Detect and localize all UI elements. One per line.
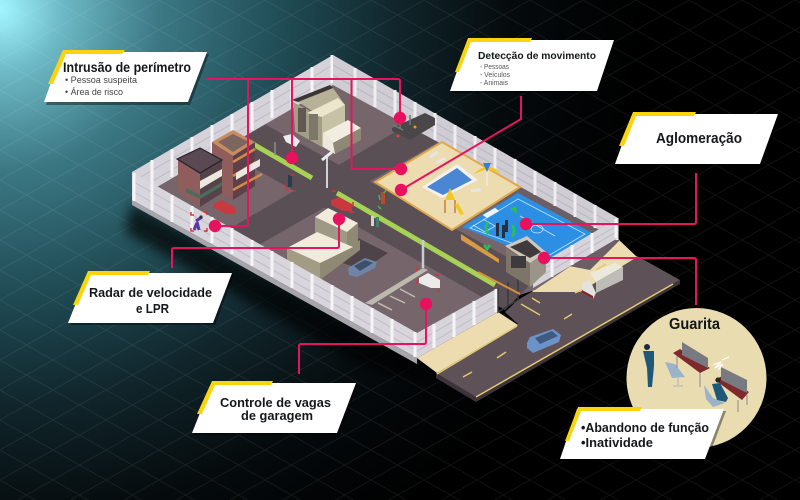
desk right: [715, 367, 749, 412]
white car: [283, 134, 300, 147]
panel: Controle de vagas de garagem: [192, 381, 358, 435]
circle: Guarita: [626, 308, 766, 448]
bench strip: [461, 234, 499, 263]
street: [436, 256, 680, 397]
sand strip: [417, 312, 518, 373]
blue van on road: [527, 329, 561, 353]
person with bracket: [285, 175, 296, 191]
green markers on court: [484, 208, 516, 249]
building left small: [177, 148, 222, 207]
sand strip near gatehouse: [530, 238, 637, 292]
building top: [292, 85, 361, 154]
red car left: [213, 200, 236, 214]
empty chair: [665, 362, 685, 386]
swimming pool: [422, 164, 478, 198]
desk left: [673, 342, 710, 387]
pool deck: [375, 142, 520, 230]
building left tall: [212, 130, 262, 200]
truck: [582, 263, 623, 299]
wall beside gatehouse: [533, 218, 618, 288]
panel: Aglomeração: Aglomeração: [656, 130, 742, 147]
panel: Abandono de função / Inatividade: [560, 407, 726, 461]
connector dots: [209, 112, 550, 310]
panel: Abandono de função / Inatividade: •Inatividade: [581, 435, 653, 450]
seated operator: [704, 377, 728, 407]
circle: Guarita: Guarita: [669, 316, 720, 333]
crowd on court: [496, 220, 508, 238]
sports court: [462, 193, 592, 262]
pole: [326, 157, 328, 188]
main road: [222, 116, 540, 310]
panel: Detecção de movimento: - Pessoas: [480, 64, 509, 71]
top gate area: [392, 113, 435, 140]
blue van parked: [348, 258, 377, 277]
panel: Radar de velocidade e LPR: [68, 271, 234, 325]
front left wall: [132, 172, 417, 364]
panel: Detecção de movimento: - Veículos: [480, 72, 510, 79]
panel: Aglomeração: [615, 112, 780, 166]
panel: Radar de velocidade e LPR: e LPR: [136, 301, 170, 316]
panel: Detecção de movimento: - Animais: [480, 80, 508, 87]
green medians: [253, 144, 495, 285]
panel: Radar de velocidade e LPR: Radar de velocidade: [89, 285, 212, 300]
panel: Controle de vagas de garagem: de garagem: [241, 408, 313, 423]
inner floor: [146, 70, 617, 345]
back left wall: [132, 55, 333, 200]
panel: Intrusão de perímetro: [44, 50, 209, 105]
isometric site: [125, 55, 680, 402]
intruder with brackets: [191, 212, 207, 231]
flagged people near deck: [378, 190, 386, 209]
line: perimeter intrusion: [205, 79, 401, 226]
umbrella: [474, 163, 501, 186]
pedestrians: [371, 216, 379, 227]
street markings: [437, 264, 673, 397]
panel: Intrusão de perímetro: Intrusão de perímetro: [63, 59, 191, 75]
red car centre with brackets: [331, 191, 354, 212]
back right wall: [333, 55, 618, 240]
panel: Intrusão de perímetro: • Pessoa suspeita: [65, 75, 138, 86]
line: motion detection: [401, 96, 521, 190]
line: speed radar: [172, 219, 339, 268]
playground: [445, 188, 464, 215]
panel: Intrusão de perímetro: • Área de risco: [65, 87, 123, 98]
panel: Detecção de movimento: Detecção de movimento: [478, 50, 596, 62]
mauve walkway by wall: [445, 142, 620, 270]
camera on pole: [322, 152, 332, 160]
red brackets on parking car: [417, 267, 440, 291]
guard standing: [643, 344, 654, 387]
small grey post: [274, 142, 276, 155]
gate: [478, 272, 520, 312]
line: crowding: [526, 173, 696, 224]
pole in parking with camera: [422, 240, 424, 268]
panel: Abandono de função / Inatividade: •Abandono de função: [581, 420, 709, 435]
white car in parking: [419, 273, 440, 288]
panel: Detecção de movimento: [450, 38, 616, 93]
zzz sleep mark: [713, 357, 729, 370]
cross road: [222, 128, 442, 250]
panel: Controle de vagas de garagem: Controle de vagas: [220, 395, 331, 410]
pink connector lines: [172, 79, 696, 374]
parking bays: [378, 289, 415, 310]
road base: [436, 280, 680, 402]
front right wall: [417, 288, 498, 358]
shadow of bottom building: [340, 238, 388, 270]
line: parking control: [299, 304, 426, 374]
line: gatehouse: [544, 258, 696, 305]
deck chairs: [430, 152, 481, 191]
building bottom: [287, 208, 360, 280]
gatehouse: [505, 236, 546, 287]
cast shadow under the site: [125, 203, 440, 385]
